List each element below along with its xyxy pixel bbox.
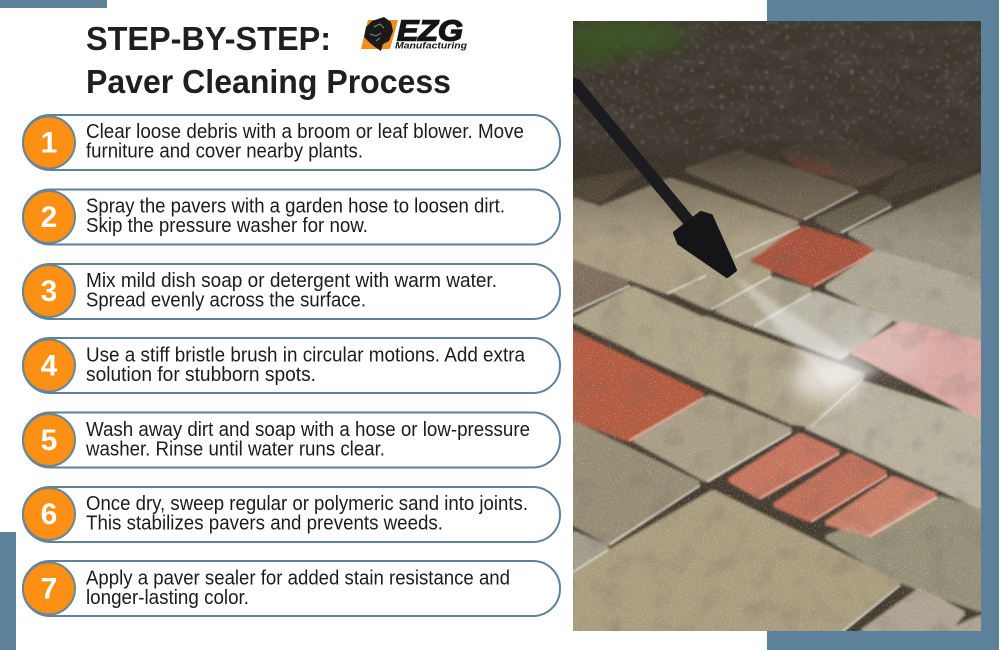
step 3 text xyxy=(86,270,497,312)
step 3 number: 3 xyxy=(41,275,57,308)
pressure washer nozzle xyxy=(675,213,735,276)
step 7 pill xyxy=(23,561,560,616)
water spray xyxy=(733,276,925,402)
title: Paver Cleaning Process xyxy=(86,63,451,100)
step 3 pill xyxy=(23,264,560,319)
step 3 text: Spread evenly across the surface. xyxy=(86,290,366,312)
step 6 text: Once dry, sweep regular or polymeric sand into joints. xyxy=(86,493,528,515)
step 5 number: 5 xyxy=(41,424,57,457)
step 4 text xyxy=(86,344,526,386)
step 7 number: 7 xyxy=(41,572,57,606)
step 6 xyxy=(23,487,560,542)
logo: EZG Manufacturing: Manufacturing xyxy=(395,40,468,50)
decorative bar: top left xyxy=(0,0,107,8)
step 2 number badge xyxy=(23,191,75,243)
paver texture xyxy=(573,135,981,631)
step 7 number badge xyxy=(23,562,75,614)
step 2 text xyxy=(86,196,505,237)
decorative bar: bottom left xyxy=(0,532,16,650)
decorative panel: behind photo xyxy=(767,0,999,650)
step 1 pill xyxy=(23,115,560,170)
step 7 text: longer-lasting color. xyxy=(86,587,249,609)
step 4 number: 4 xyxy=(41,350,58,382)
step 1 text: furniture and cover nearby plants. xyxy=(86,140,363,162)
step 2 number: 2 xyxy=(41,201,57,234)
step 1 number: 1 xyxy=(41,126,57,160)
step 1 text: Clear loose debris with a broom or leaf blower. Move xyxy=(86,121,524,143)
step 5 text: Wash away dirt and soap with a hose or low-pressure xyxy=(86,419,530,441)
step 2 text: Skip the pressure washer for now. xyxy=(86,215,368,237)
step 3 xyxy=(23,264,560,319)
step 3 text: Mix mild dish soap or detergent with warm water. xyxy=(86,270,497,292)
pressure washer wand xyxy=(570,76,694,226)
step 5 xyxy=(23,412,560,468)
step 7 text xyxy=(86,568,510,609)
step 4 number badge xyxy=(23,340,75,392)
step 5 text xyxy=(85,419,530,460)
step 2 xyxy=(23,190,560,244)
step 6 number: 6 xyxy=(41,498,57,531)
paver edge highlights xyxy=(573,192,936,632)
step 4 pill xyxy=(23,338,560,393)
photo: pressure washer cleaning pavers xyxy=(563,19,981,632)
step 4 text: Use a stiff bristle brush in circular motions. Add extra xyxy=(86,344,526,366)
step 4 text: solution for stubborn spots. xyxy=(86,364,316,386)
step 1 text xyxy=(86,121,524,162)
step 6 pill xyxy=(23,487,560,542)
logo: EZG Manufacturing: EZG xyxy=(397,16,463,48)
step 7 xyxy=(23,561,560,616)
logo: EZG Manufacturing xyxy=(361,16,468,51)
step 2 pill xyxy=(23,190,560,244)
step 4 xyxy=(23,338,560,393)
title: STEP-BY-STEP: xyxy=(86,20,331,57)
step 7 text: Apply a paver sealer for added stain resistance and xyxy=(86,568,510,590)
step 6 number badge xyxy=(23,488,75,540)
step 5 number badge xyxy=(23,414,75,466)
pavers xyxy=(573,135,981,631)
step 3 number badge xyxy=(23,265,75,317)
step 6 text: This stabilizes pavers and prevents weeds. xyxy=(86,512,443,534)
title xyxy=(86,20,451,100)
step 2 text: Spray the pavers with a garden hose to loosen dirt. xyxy=(86,196,505,218)
step 6 text xyxy=(86,493,528,534)
step 5 text: washer. Rinse until water runs clear. xyxy=(85,438,385,460)
soil and foliage xyxy=(573,21,981,165)
step 1 number badge xyxy=(23,116,75,168)
step 1 xyxy=(23,115,560,170)
step 5 pill xyxy=(23,412,560,468)
